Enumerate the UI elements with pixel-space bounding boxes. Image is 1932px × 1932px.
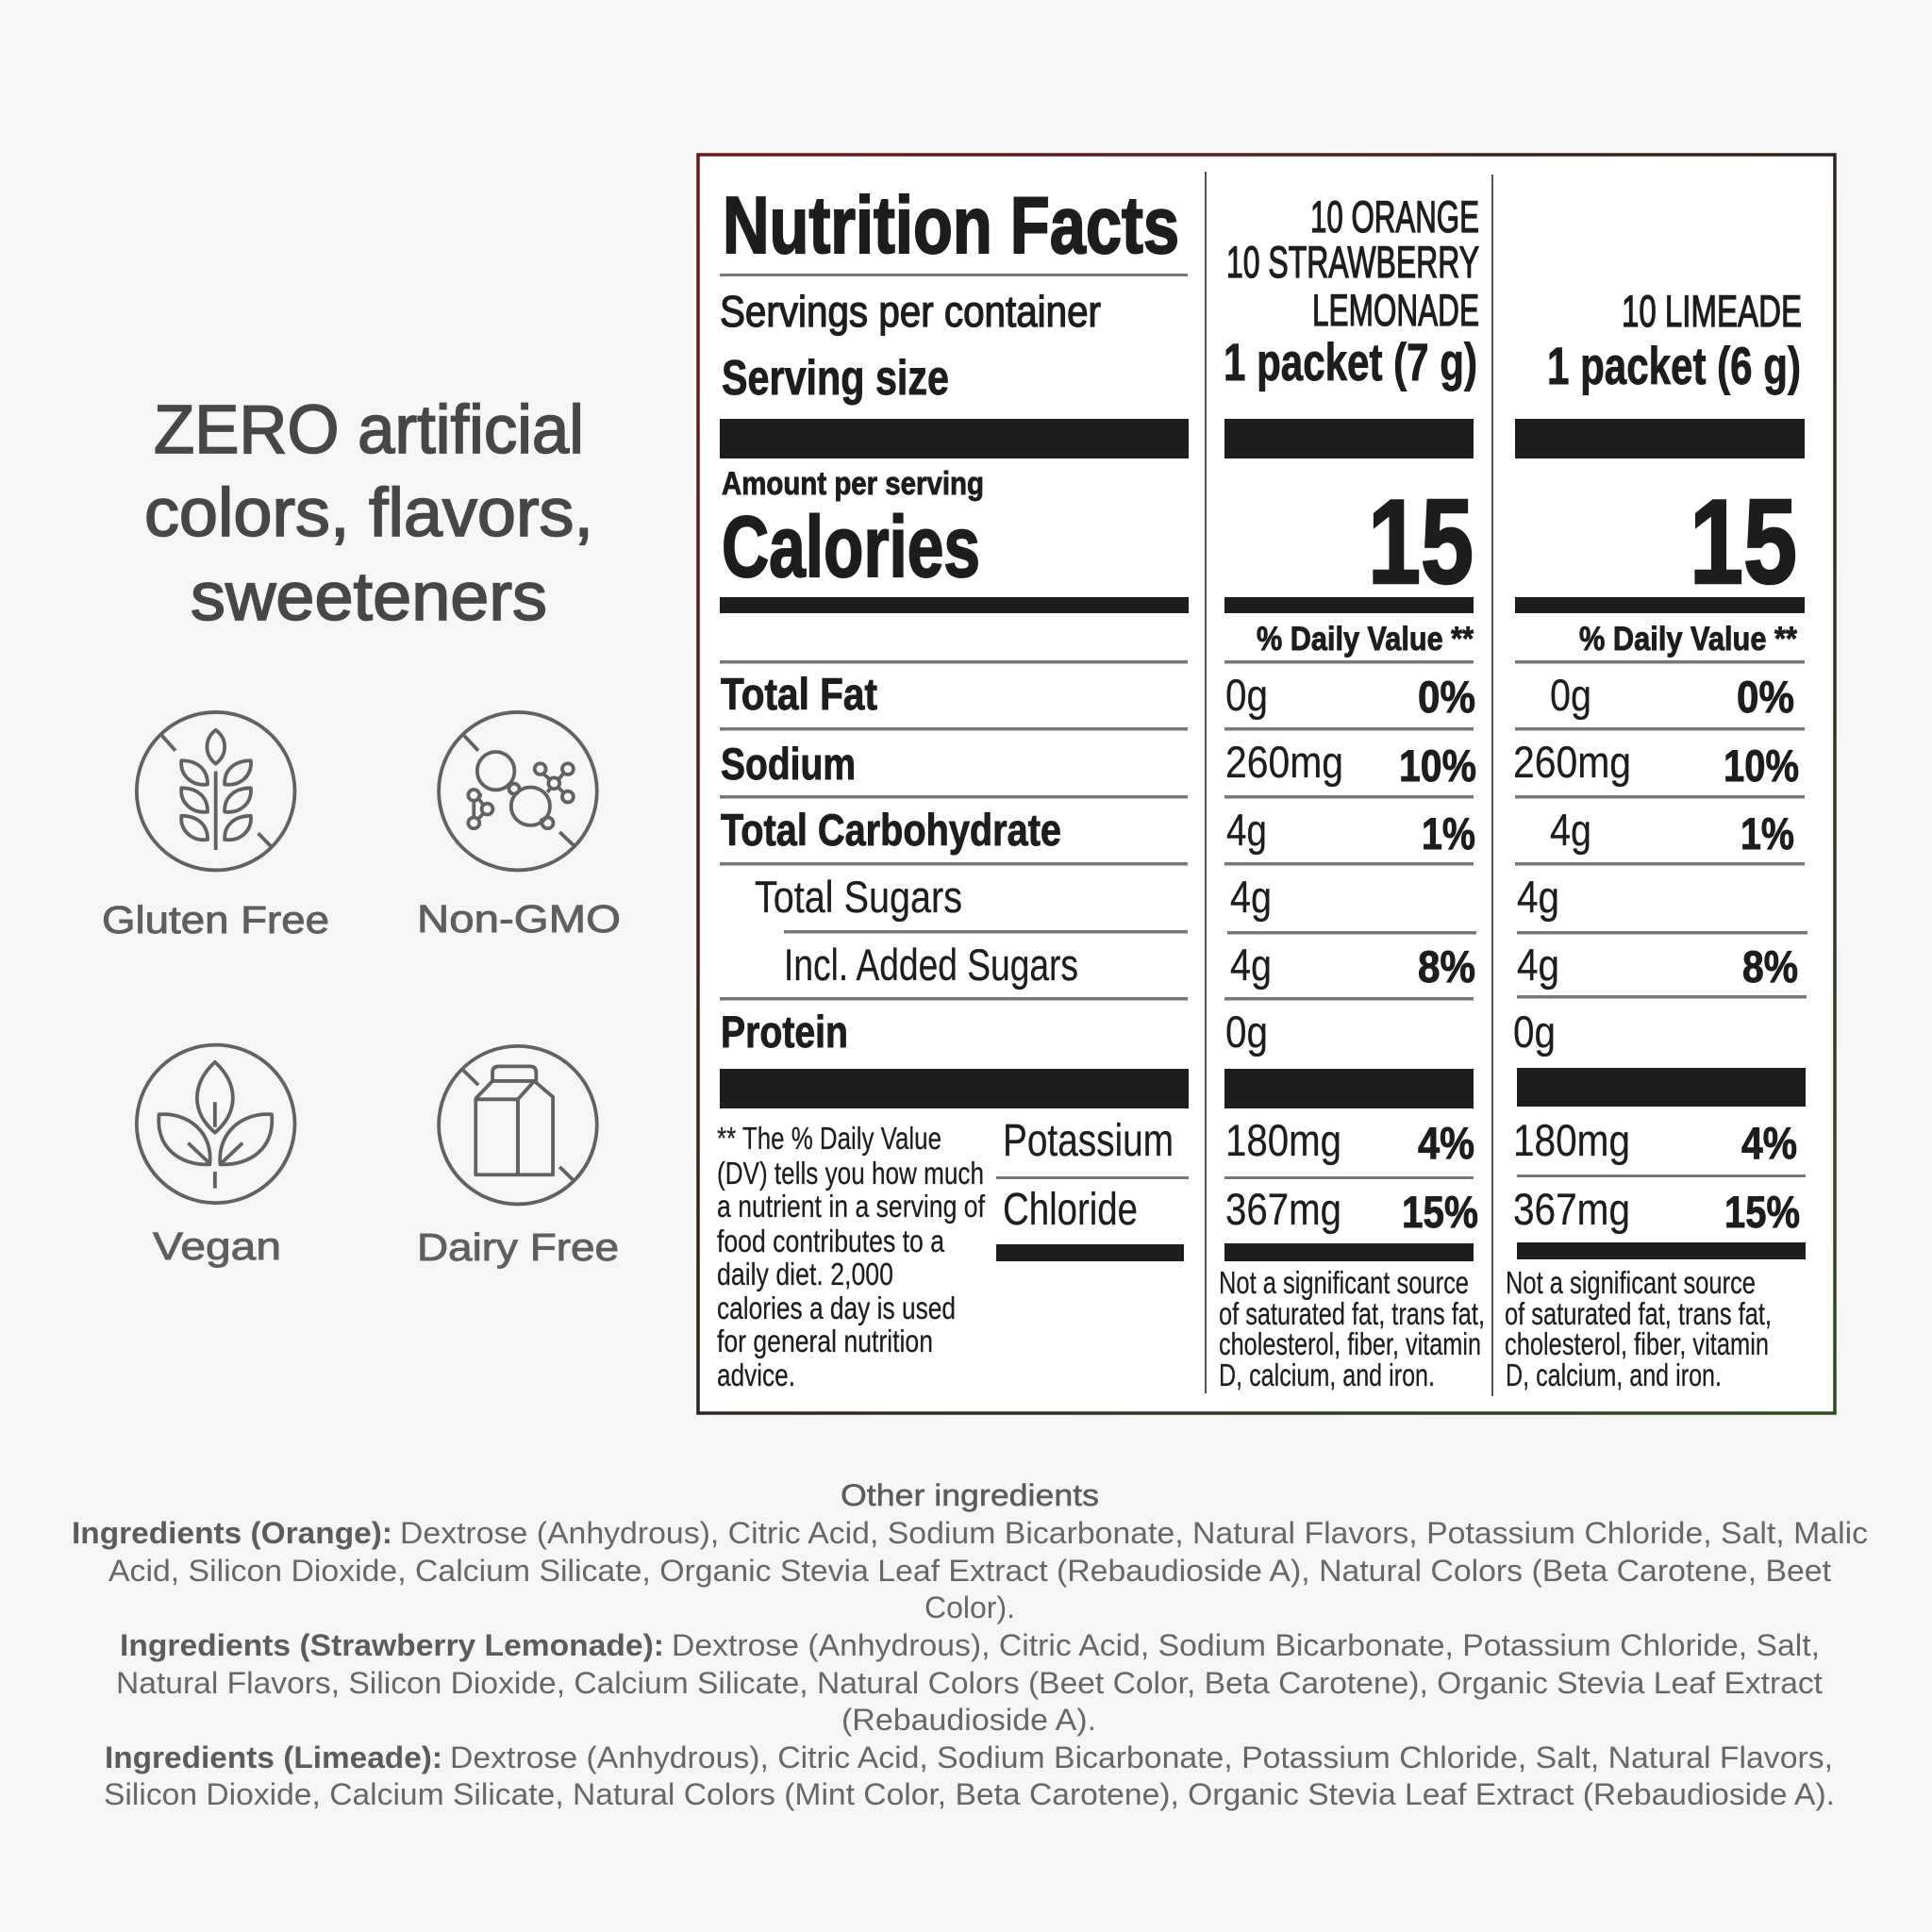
nutrient names: Total Sugars — [755, 872, 962, 922]
column header: orange and strawberry lemonade: LEMONADE — [1312, 285, 1479, 335]
values: limeade: 367mg — [1513, 1184, 1630, 1234]
nutrient names: Incl. Added Sugars — [784, 940, 1078, 990]
serving information: Amount per serving — [722, 466, 984, 502]
column header: orange and strawberry lemonade: 10 STRAWBERRY — [1226, 237, 1479, 287]
values: limeade — [1513, 670, 1800, 1237]
label: dairy free: Dairy Free — [417, 1225, 619, 1269]
values: orange and strawberry lemonade — [1225, 670, 1478, 1237]
serving information — [720, 287, 1101, 502]
values: limeade: 8% — [1742, 941, 1798, 991]
other ingredients text block: Acid, Silicon Dioxide, Calcium Silicate, Organic Stevia Leaf Extract (Rebaudioside A), Natural Colors (Beta Carotene, Beet — [108, 1554, 1831, 1588]
column header: limeade — [1547, 286, 1802, 395]
heading: zero artificial: sweeteners — [191, 559, 547, 635]
values: limeade: 180mg — [1513, 1115, 1630, 1165]
not a significant source note: second column: of saturated fat, trans fat, — [1505, 1296, 1772, 1331]
column header: limeade: 1 packet (6 g) — [1547, 336, 1801, 395]
icon: vegan — [137, 1045, 294, 1203]
other ingredients text block: Ingredients (Limeade): — [105, 1740, 442, 1774]
other ingredients text block: Other ingredients — [841, 1478, 1099, 1512]
other ingredients text block — [72, 1478, 1868, 1811]
values: orange and strawberry lemonade: 15% — [1402, 1187, 1478, 1237]
column header: orange and strawberry lemonade: 1 packet (7 g) — [1224, 332, 1477, 391]
values: limeade: 4g — [1517, 940, 1559, 990]
values: orange and strawberry lemonade: 367mg — [1225, 1184, 1341, 1234]
calories row: 15 — [1368, 475, 1474, 608]
values: limeade: 260mg — [1513, 737, 1631, 787]
column header: orange and strawberry lemonade — [1224, 192, 1479, 391]
heading: zero artificial: ZERO artificial — [154, 392, 584, 468]
other ingredients text block: Dextrose (Anhydrous), Citric Acid, Sodium Bicarbonate, Natural Flavors, Potassium Chloride, Salt, Malic — [400, 1516, 1868, 1550]
values: orange and strawberry lemonade: 0g — [1225, 670, 1268, 720]
daily value headers — [1257, 621, 1797, 658]
other ingredients text block: Ingredients (Orange): — [72, 1516, 392, 1550]
heading: zero artificial: colors, flavors, — [144, 475, 593, 551]
values: orange and strawberry lemonade: 4g — [1230, 872, 1272, 922]
other ingredients text block: Silicon Dioxide, Calcium Silicate, Natural Colors (Mint Color, Beta Carotene), Organic Stevia Leaf Extract (Rebaudioside A). — [104, 1777, 1835, 1811]
values: orange and strawberry lemonade: 8% — [1418, 941, 1475, 991]
nutrient names: Sodium — [721, 739, 856, 789]
nutrient names: Total Fat — [721, 669, 877, 719]
calories row: Calories — [722, 499, 980, 595]
values: limeade: 0g — [1513, 1007, 1556, 1057]
serving information: Servings per container — [720, 287, 1101, 336]
label: gluten free: Gluten Free — [102, 898, 329, 941]
daily value footnote — [717, 1121, 986, 1392]
calories row: 15 — [1690, 475, 1797, 608]
values: limeade: 1% — [1740, 808, 1794, 858]
column header: limeade: 10 LIMEADE — [1622, 286, 1802, 336]
nutrient names: Potassium — [1003, 1116, 1174, 1166]
thin rules — [720, 274, 1807, 1179]
serving information: Serving size — [722, 351, 949, 406]
title: nutrition facts: Nutrition Facts — [723, 181, 1179, 271]
not a significant source note: first column: Not a significant source — [1219, 1265, 1469, 1300]
calories row — [722, 475, 1797, 608]
values: orange and strawberry lemonade: 1% — [1422, 808, 1475, 858]
daily value footnote: a nutrient in a serving of — [717, 1189, 986, 1224]
label: non-GMO: Non-GMO — [417, 897, 621, 941]
column header: orange and strawberry lemonade: 10 ORANGE — [1310, 192, 1479, 242]
values: orange and strawberry lemonade: 4g — [1226, 805, 1267, 855]
daily value footnote: calories a day is used — [717, 1291, 956, 1325]
values: orange and strawberry lemonade: 260mg — [1225, 737, 1343, 787]
other ingredients text block: Dextrose (Anhydrous), Citric Acid, Sodium Bicarbonate, Potassium Chloride, Salt, Natural Flavors, — [450, 1740, 1833, 1774]
not a significant source note: second column: Not a significant source — [1506, 1265, 1756, 1300]
icon: non-GMO — [439, 712, 597, 870]
nutrient names: Total Carbohydrate — [721, 805, 1061, 855]
icon: gluten free — [137, 712, 294, 870]
values: limeade: 15% — [1724, 1187, 1800, 1237]
other ingredients text block: (Rebaudioside A). — [841, 1703, 1096, 1737]
other ingredients text block: Natural Flavors, Silicon Dioxide, Calcium Silicate, Natural Colors (Beet Color, Beta Carotene), Organic Stevia Leaf Extract — [116, 1666, 1823, 1700]
not a significant source note: second column: D, calcium, and iron. — [1506, 1357, 1722, 1392]
column dividers — [1206, 172, 1492, 1396]
values: limeade: 0% — [1737, 672, 1794, 722]
daily value footnote: for general nutrition — [717, 1324, 933, 1358]
daily value footnote: food contributes to a — [717, 1224, 945, 1258]
other ingredients text block: Ingredients (Strawberry Lemonade): — [120, 1628, 664, 1662]
heading: zero artificial — [144, 392, 593, 635]
values: limeade: 4% — [1741, 1118, 1797, 1168]
values: limeade: 10% — [1724, 741, 1799, 791]
daily value headers: % Daily Value ** — [1579, 621, 1797, 658]
values: orange and strawberry lemonade: 180mg — [1225, 1115, 1341, 1165]
nutrient names: Protein — [721, 1007, 848, 1057]
values: limeade: 0g — [1550, 670, 1591, 720]
not a significant source note: first column: cholesterol, fiber, vitamin — [1219, 1326, 1481, 1361]
not a significant source note: first column — [1219, 1265, 1485, 1392]
values: orange and strawberry lemonade: 4g — [1230, 940, 1272, 990]
not a significant source note: first column: of saturated fat, trans fat, — [1219, 1296, 1485, 1331]
values: orange and strawberry lemonade: 0g — [1225, 1007, 1268, 1057]
daily value footnote: advice. — [717, 1357, 795, 1392]
black bars — [720, 419, 1806, 1261]
nutrient names: Chloride — [1003, 1185, 1138, 1235]
values: orange and strawberry lemonade: 10% — [1399, 741, 1476, 791]
daily value headers: % Daily Value ** — [1257, 621, 1474, 658]
daily value footnote: ** The % Daily Value — [717, 1121, 941, 1156]
other ingredients text block: Color). — [924, 1591, 1015, 1624]
not a significant source note: second column: cholesterol, fiber, vitamin — [1505, 1326, 1769, 1361]
daily value footnote: daily diet. 2,000 — [717, 1257, 893, 1291]
daily value footnote: (DV) tells you how much — [717, 1156, 984, 1191]
values: limeade: 4g — [1517, 872, 1559, 922]
label: vegan: Vegan — [153, 1224, 281, 1268]
not a significant source note: second column — [1505, 1265, 1772, 1392]
icon: dairy free — [439, 1046, 597, 1204]
other ingredients text block: Dextrose (Anhydrous), Citric Acid, Sodium Bicarbonate, Potassium Chloride, Salt, — [672, 1628, 1820, 1662]
nutrient names — [721, 669, 1174, 1235]
panel: nutrition facts — [698, 155, 1835, 1413]
values: orange and strawberry lemonade: 0% — [1418, 672, 1475, 722]
not a significant source note: first column: D, calcium, and iron. — [1219, 1357, 1435, 1392]
values: limeade: 4g — [1550, 805, 1591, 855]
values: orange and strawberry lemonade: 4% — [1418, 1118, 1474, 1168]
